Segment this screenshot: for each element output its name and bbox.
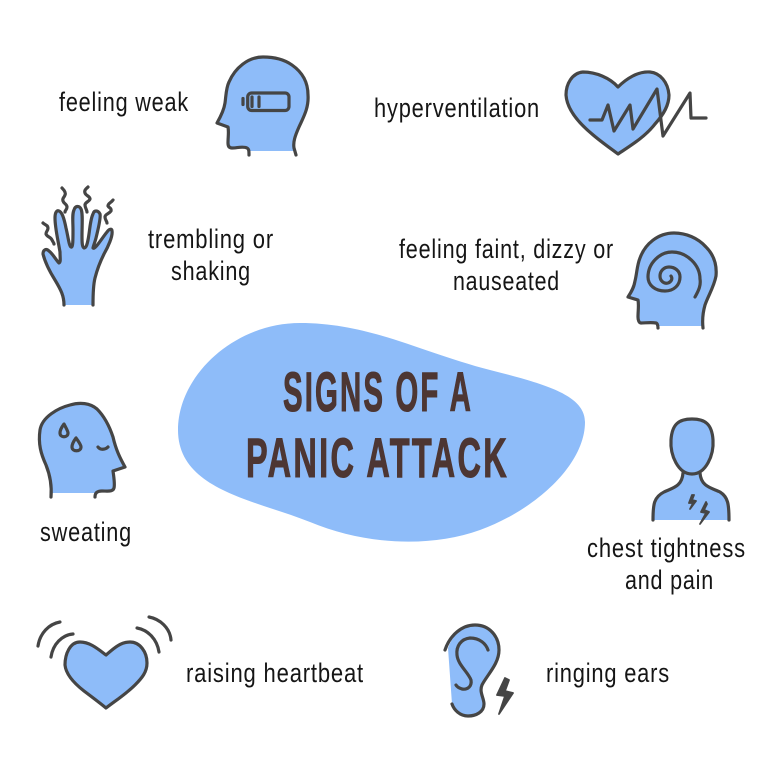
item: sweating bbox=[39, 403, 132, 547]
item: trembling or shaking bbox=[43, 187, 274, 305]
item: feeling faint, dizzy or nauseated: feeling faint, dizzy or bbox=[399, 234, 614, 264]
title: SIGNS OF A bbox=[283, 360, 473, 423]
item: trembling or shaking: trembling or bbox=[148, 224, 274, 254]
icon: sweating head bbox=[39, 403, 125, 497]
item: trembling or shaking: shaking bbox=[171, 256, 251, 286]
item: hyperventilation: hyperventilation bbox=[374, 93, 540, 123]
title bbox=[246, 360, 509, 489]
icon: heart with pulse line bbox=[566, 72, 706, 154]
item: raising heartbeat bbox=[38, 617, 364, 708]
icon: head with spiral bbox=[628, 233, 716, 328]
item: feeling weak bbox=[59, 57, 308, 155]
icon: heart with vibration arcs bbox=[38, 617, 171, 708]
item: feeling faint, dizzy or nauseated bbox=[399, 233, 716, 328]
item: raising heartbeat: raising heartbeat bbox=[186, 658, 364, 688]
item: chest tightness and pain bbox=[587, 419, 746, 595]
icon: trembling hand bbox=[43, 187, 113, 305]
item: hyperventilation bbox=[374, 72, 706, 154]
central blob with title bbox=[178, 323, 585, 542]
icon: person with chest lightning bbox=[653, 419, 729, 524]
item: feeling weak: feeling weak bbox=[59, 87, 189, 117]
item: ringing ears: ringing ears bbox=[546, 658, 670, 688]
icon: head with low battery bbox=[217, 57, 308, 155]
item: ringing ears bbox=[445, 625, 670, 716]
title: PANIC ATTACK bbox=[246, 426, 509, 489]
item: sweating: sweating bbox=[40, 517, 132, 547]
item: feeling faint, dizzy or nauseated: nauseated bbox=[453, 266, 560, 296]
item: chest tightness and pain: and pain bbox=[625, 565, 714, 595]
icon: ear with lightning bbox=[445, 625, 513, 716]
